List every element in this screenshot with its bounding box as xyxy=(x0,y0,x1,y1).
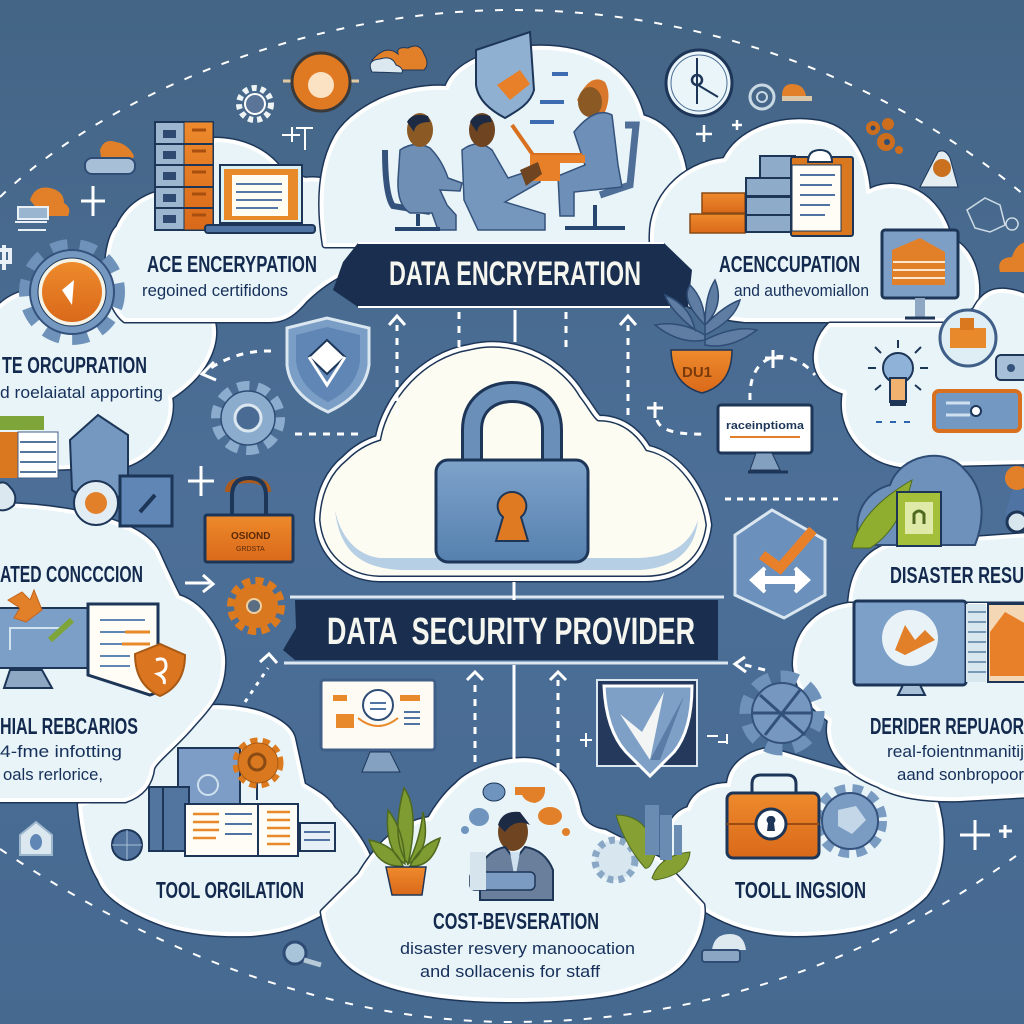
icon: padlock shackle xyxy=(472,392,552,465)
icon: plant with orange pot top: DU1 xyxy=(682,364,712,381)
dashed orbit: top xyxy=(0,10,1024,197)
icon: monitor receipt: raceinptioma xyxy=(726,420,805,432)
decoration: small dashes xyxy=(876,421,916,423)
figure: seated man left xyxy=(385,113,462,230)
icon: orange padlock tag: GRDSTA xyxy=(236,546,265,553)
banner: data security provider xyxy=(283,597,728,663)
icon: orange framed card xyxy=(934,391,1020,431)
connector: dotted right of center cloud xyxy=(725,498,838,500)
icon: shield with cube xyxy=(287,318,369,412)
heading: cost-beverseration: COST-BEVSERATION xyxy=(433,908,599,934)
icon: padlock shackle highlight xyxy=(472,392,552,465)
icon: puzzle outline xyxy=(967,198,1018,232)
banner title: data encryeration: DATA ENCRYERATION xyxy=(389,255,641,293)
text: real-time monitoring caption: real-foientnmanitij xyxy=(887,742,1024,761)
icon: monitor receipt xyxy=(718,405,812,472)
icon: clipboard xyxy=(791,150,853,236)
panel: left middle cloud xyxy=(0,292,214,478)
icon: monitor with house xyxy=(882,230,958,318)
connector: arrow up right of center xyxy=(620,316,636,415)
text: disaster recovery caption: disaster resvery manoocation xyxy=(400,939,635,958)
central cloud xyxy=(317,344,709,579)
dashed orbit: bottom xyxy=(0,849,1024,1022)
icon: orange boxes xyxy=(690,193,745,233)
arrow: left to banner xyxy=(735,657,765,672)
panel: top right cloud xyxy=(652,121,977,320)
icon: orange dial xyxy=(283,53,359,111)
text: real-time caption: 4-fme infotting xyxy=(0,742,122,761)
icon: orange person edge xyxy=(1005,466,1024,515)
icon: small lock tag xyxy=(996,355,1024,380)
icon: small gear edge xyxy=(1007,512,1024,532)
icon: sparkle plus cluster xyxy=(282,127,313,150)
icon: orange laptop and desk xyxy=(512,125,585,186)
icon: document with shield xyxy=(88,604,185,696)
icon: globe xyxy=(112,830,142,860)
heading: ace encerypation: ACE ENCERYPATION xyxy=(147,251,317,277)
icon: plant with orange pot top xyxy=(655,280,757,393)
line: center vertical xyxy=(512,582,516,760)
icon: orange briefcase with keyhole xyxy=(727,775,819,858)
icon: orange gear on book xyxy=(236,741,280,800)
figure: woman at laptop xyxy=(558,79,636,228)
icon: padlock body xyxy=(436,460,588,562)
arrow: right from left cloud xyxy=(185,575,213,592)
icon: small edge marker xyxy=(0,245,10,270)
icon: open book xyxy=(185,804,298,856)
icon: orange cloud right edge xyxy=(999,242,1024,272)
icon: plus mid left xyxy=(188,466,214,496)
panel: bottom right cloud xyxy=(664,750,942,934)
icon: sparkles top right xyxy=(696,120,742,142)
icon: light bulb xyxy=(868,340,928,406)
connector: dashed up left of center xyxy=(389,316,405,415)
heading: te orcupration: TE ORCUPRATION xyxy=(2,352,147,378)
heading: tooll ingsion: TOOLL INGSION xyxy=(735,877,866,903)
panel: bottom left cloud xyxy=(80,707,370,934)
icon: monitor xyxy=(0,608,90,688)
icon: magnifier xyxy=(284,942,321,965)
icon: potted plant bottom center xyxy=(369,788,440,895)
icon: blueprint board xyxy=(178,748,240,820)
icon: monitor dashboard xyxy=(321,680,435,772)
icon: shield-lock document left xyxy=(70,415,172,526)
icon: monitor with orange chart xyxy=(854,601,1024,695)
icon: gear cross xyxy=(746,677,818,749)
heading: acencupation: ACENCCUPATION xyxy=(719,251,860,277)
icon: plus left xyxy=(81,186,105,216)
icon: orange padlock tag xyxy=(205,478,293,562)
banner title: data security provider: DATA SECURITY PROVIDER xyxy=(327,611,695,653)
shading: cloud lower rim xyxy=(335,510,698,570)
panel: top center cloud xyxy=(322,32,686,245)
arrow: dotted up to lower banner xyxy=(245,654,277,702)
icon: cloud with green padlock xyxy=(852,456,982,548)
icon: shield check xyxy=(597,680,697,776)
connector: center top xyxy=(514,310,516,342)
panel: top left cloud xyxy=(107,122,368,320)
icon: cloud with server xyxy=(15,188,69,230)
icon: binders xyxy=(149,787,189,851)
text: resources caption: oals rerlorice, xyxy=(3,765,103,784)
icon: laptop xyxy=(205,165,315,233)
connector: dashed left curve xyxy=(202,351,271,380)
text: authentication caption: and authevomiallon xyxy=(734,281,869,300)
icon: side document xyxy=(300,823,335,851)
panel: right lower cloud upper xyxy=(850,535,1024,620)
text: left middle caption: d roelaiatal apporting xyxy=(0,383,163,402)
panel: left lower cloud xyxy=(0,505,223,800)
connector: dashed curve to monitor xyxy=(647,402,708,434)
icon: shield with document xyxy=(476,32,534,118)
text: staff caption: and sollacenis for staff xyxy=(420,962,600,981)
icon: house marker lower left xyxy=(20,822,52,855)
figure: man with tie xyxy=(470,812,553,900)
icon: orange arrow xyxy=(8,590,42,622)
icon: pale gear and leaves xyxy=(595,805,690,880)
icon: blue gear xyxy=(216,386,280,450)
icon: hooded person marker xyxy=(920,151,958,187)
text: certifications caption: regoined certifidons xyxy=(142,281,288,300)
icon: round badge xyxy=(940,310,996,366)
icon: small white gear xyxy=(239,88,271,120)
heading: tool orgilation: TOOL ORGILATION xyxy=(156,877,304,903)
icon: server rack xyxy=(155,122,213,230)
icon: orange padlock tag: OSIOND xyxy=(231,531,270,542)
icon: thought bubbles xyxy=(461,783,570,836)
icon: small bottom cloud xyxy=(702,934,746,962)
icon: small cloud outline left xyxy=(0,482,15,510)
connector: dashed curve right xyxy=(750,350,815,400)
icon: small cloud left xyxy=(85,141,135,174)
panel: right middle cloud xyxy=(816,291,1024,465)
icon: orange gear center left xyxy=(231,581,281,631)
icon: database stack xyxy=(746,156,795,232)
icon: orange gears cluster xyxy=(866,118,903,154)
figure: seated man center xyxy=(462,113,545,230)
icon: report table xyxy=(0,416,58,478)
icon: shield hexagon check xyxy=(735,510,825,618)
banner: data encryption xyxy=(333,243,692,307)
panel: right lower cloud xyxy=(795,601,1024,799)
heading: ated concccion: ATED CONCCCION xyxy=(0,561,143,587)
icon: clock xyxy=(666,50,732,116)
heading: hial rebcarios: HIAL REBCARIOS xyxy=(0,713,138,739)
connector: dash to gear xyxy=(295,432,362,436)
marks: dash near shield xyxy=(707,734,728,744)
text: and reports caption: aand sonbropoor xyxy=(897,765,1024,784)
connector: dotted left of center xyxy=(458,312,460,352)
icon: at sign with orange hat xyxy=(750,84,812,109)
text marks: floating code lines xyxy=(530,72,568,124)
icon: large gear with orange dial xyxy=(26,246,118,338)
icon: gear behind briefcase xyxy=(818,789,882,853)
connector: dotted right of center xyxy=(564,312,568,352)
icon: small orange cloud top xyxy=(370,46,427,73)
arrow: up right of center xyxy=(550,672,566,770)
marks: plus signs lower right xyxy=(960,820,1012,850)
panel: bottom center cloud xyxy=(323,760,702,1000)
icon: small plus near shield xyxy=(580,733,592,747)
arrow: up left of center xyxy=(467,672,483,762)
